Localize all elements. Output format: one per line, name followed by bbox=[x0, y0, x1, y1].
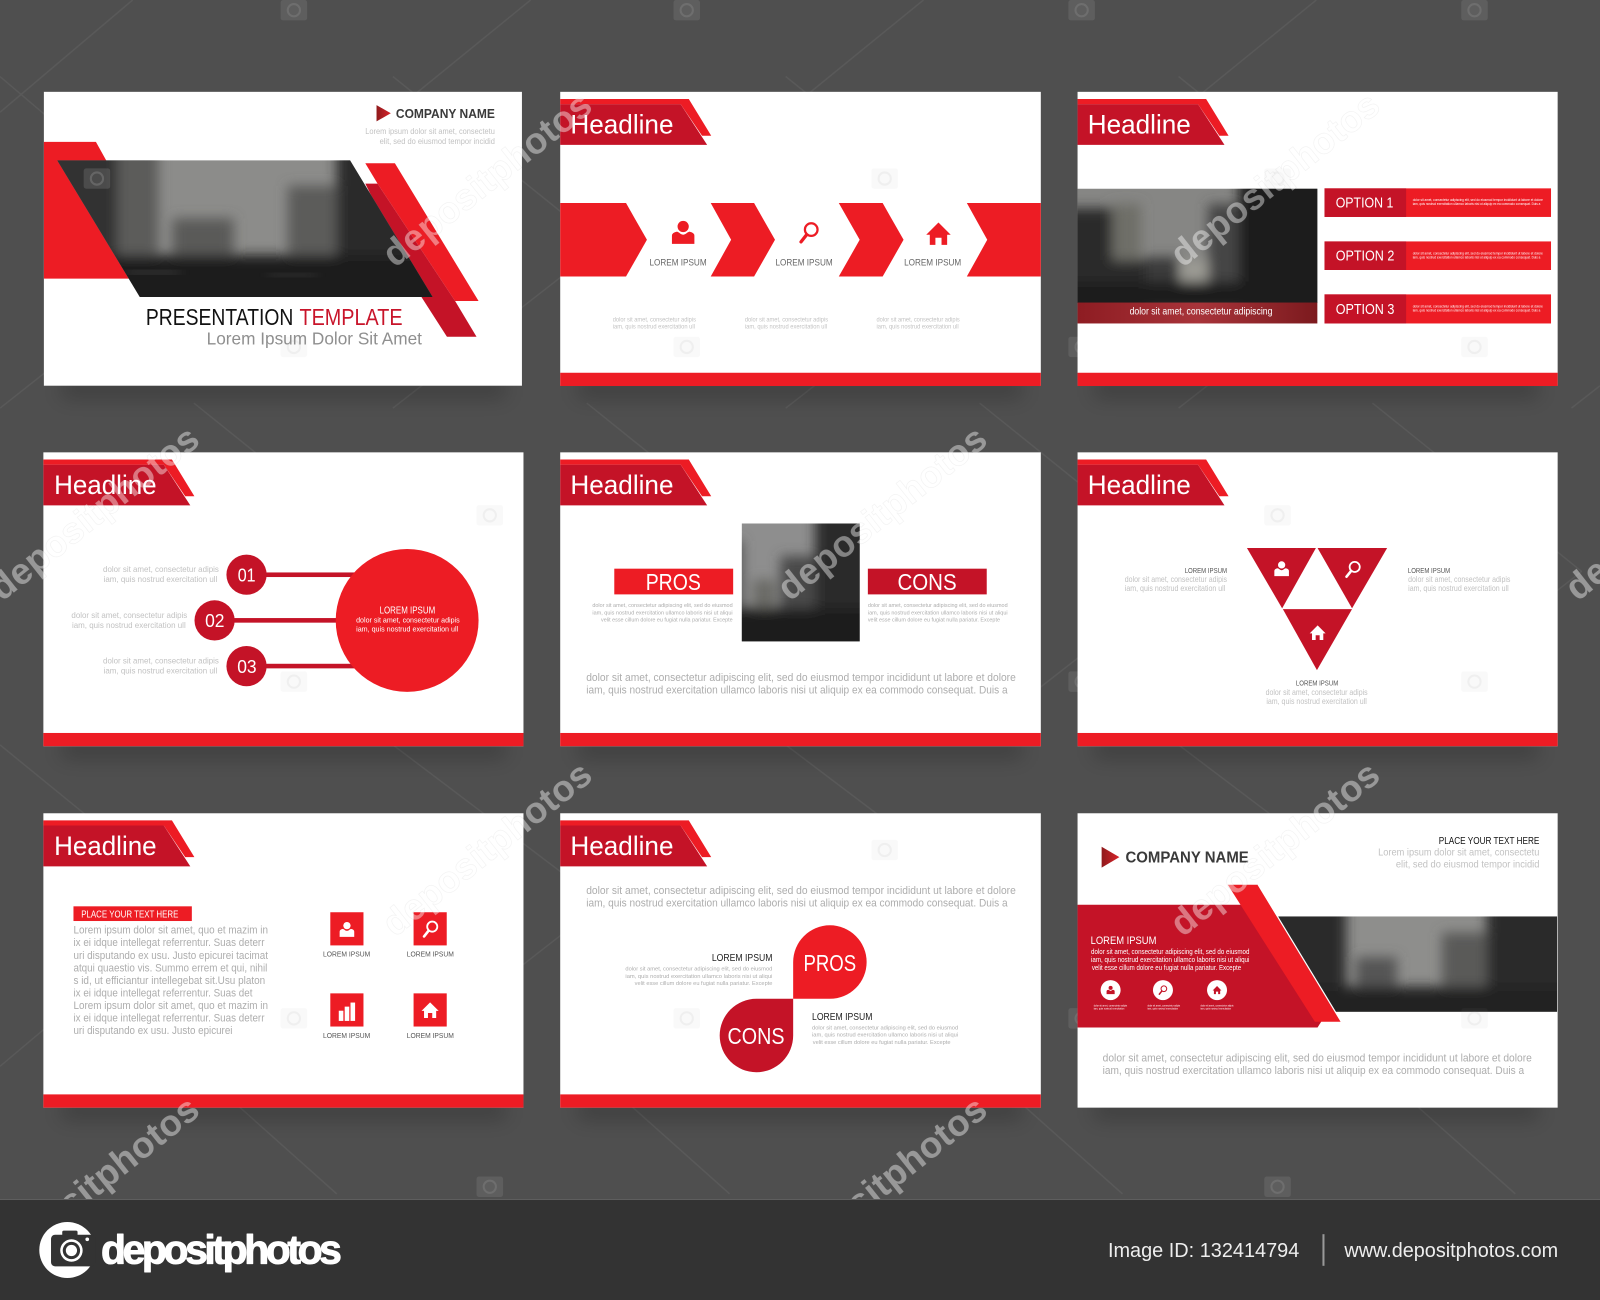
paragraph bbox=[73, 924, 268, 1037]
left text: dolor sit amet, consectetur adipis bbox=[1125, 575, 1227, 584]
text tag: PLACE YOUR TEXT HERE bbox=[81, 909, 179, 920]
step descriptions: dolor sit amet, consectetur adipis bbox=[613, 316, 696, 323]
step descriptions: iam, quis nostrud exercitation ull bbox=[613, 324, 695, 331]
item descriptions: dolor sit amet, consectetur adipis bbox=[103, 564, 219, 574]
pros description: dolor sit amet, consectetur adipiscing elit, sed do eiusmod bbox=[592, 603, 733, 609]
presentation title: TEMPLATE bbox=[299, 304, 403, 330]
body text: dolor sit amet, consectetur adipiscing elit, sed do eiusmod tempor incididunt ut labore et dolore bbox=[586, 672, 1016, 684]
presentation title: PRESENTATION bbox=[146, 304, 293, 330]
step descriptions bbox=[613, 316, 960, 331]
watermark camera marks on background bbox=[281, 0, 1488, 1197]
body text: dolor sit amet, consectetur adipiscing elit, sed do eiusmod tempor incididunt ut labore et dolore bbox=[586, 885, 1016, 897]
red block behind photo bbox=[44, 142, 204, 279]
headline banner: Headline bbox=[54, 831, 157, 861]
company name: COMPANY NAME bbox=[396, 106, 495, 121]
watermark text: depositphotos bbox=[769, 417, 994, 608]
item descriptions bbox=[71, 564, 219, 675]
option 2 bar bbox=[1324, 241, 1551, 270]
step descriptions: iam, quis nostrud exercitation ull bbox=[745, 324, 827, 331]
triangle left bbox=[1247, 548, 1316, 608]
option 1 bar: iam, quis nostrud exercitation ullamco laboris nisi ut aliquip ex ea commodo consequat. Duis a bbox=[1413, 202, 1541, 206]
icon tile: search: LOREM IPSUM bbox=[407, 950, 454, 959]
headline banner bbox=[43, 820, 194, 866]
bottom text: LOREM IPSUM bbox=[1296, 679, 1338, 688]
right text: iam, quis nostrud exercitation ull bbox=[1408, 584, 1509, 593]
right text: LOREM IPSUM bbox=[1408, 566, 1450, 575]
circle 01: 01 bbox=[238, 565, 256, 586]
panel icon: person bbox=[1094, 980, 1127, 1011]
slide 9: closing slide bbox=[1078, 813, 1573, 1108]
body text: dolor sit amet, consectetur adipiscing elit, sed do eiusmod tempor incididunt ut labore et dolore bbox=[1103, 1052, 1532, 1064]
panel icon: search: dolor sit amet, consectetur adipis bbox=[1147, 1004, 1180, 1008]
slide 3: options bbox=[1057, 92, 1558, 386]
item descriptions: dolor sit amet, consectetur adipis bbox=[103, 655, 219, 665]
bottom text: iam, quis nostrud exercitation ull bbox=[1266, 697, 1367, 706]
pros description bbox=[592, 603, 733, 623]
bright diagonal strip bbox=[1228, 885, 1341, 1022]
paragraph: atqui quaestio vis. Summo errem et qui, nihil bbox=[73, 962, 267, 974]
circle 01 bbox=[226, 555, 267, 595]
chevrons bbox=[560, 203, 1041, 277]
photo caption band bbox=[1078, 303, 1317, 323]
panel icon: home bbox=[1201, 980, 1234, 1011]
big circle bbox=[336, 549, 479, 692]
bottom text: dolor sit amet, consectetur adipis bbox=[1266, 688, 1368, 697]
icon tile: home: LOREM IPSUM bbox=[407, 1031, 454, 1040]
step descriptions: dolor sit amet, consectetur adipis bbox=[745, 316, 828, 323]
paragraph: uri disputando ex usu. Justo epicurei bbox=[73, 1025, 232, 1037]
cons box: CONS bbox=[897, 569, 957, 595]
step labels: LOREM IPSUM bbox=[649, 257, 707, 267]
cons drop bbox=[720, 999, 793, 1072]
blurred city photo bbox=[1078, 188, 1318, 303]
panel icon: search: iam, quis nostrud exercitation bbox=[1147, 1007, 1178, 1011]
paragraph: ix ei idque intellegat referrentur. Suas deterr bbox=[73, 937, 265, 949]
headline banner bbox=[43, 459, 194, 505]
pros text: dolor sit amet, consectetur adipiscing elit, sed do eiusmod bbox=[625, 967, 772, 973]
slide 1: title slide bbox=[31, 92, 522, 386]
option 3 bar bbox=[1324, 294, 1551, 323]
pros text: LOREM IPSUM bbox=[712, 953, 772, 964]
triangle right bbox=[1318, 548, 1387, 608]
connector lines bbox=[214, 572, 367, 668]
option 3 bar: OPTION 3 bbox=[1336, 302, 1394, 318]
panel text bbox=[1091, 935, 1250, 972]
body text: iam, quis nostrud exercitation ullamco laboris nisi ut aliquip ex ea commodo consequat. Duis a bbox=[586, 684, 1008, 696]
cons text: dolor sit amet, consectetur adipiscing elit, sed do eiusmod bbox=[812, 1025, 958, 1031]
intro text bbox=[365, 127, 495, 146]
circle 02 bbox=[194, 600, 235, 641]
watermark text: depositphotos bbox=[374, 753, 600, 944]
pros description: iam, quis nostrud exercitation ullamco laboris nisi ut aliqui bbox=[592, 610, 733, 616]
intro text: Lorem ipsum dolor sit amet, consectetu bbox=[365, 127, 495, 136]
top right text: PLACE YOUR TEXT HERE bbox=[1439, 836, 1540, 847]
pros box bbox=[614, 569, 733, 595]
watermark text: depositphotos bbox=[1162, 753, 1387, 944]
icon: home bbox=[926, 222, 951, 245]
intro text: elit, sed do eiusmod tempor incidid bbox=[380, 137, 495, 146]
paragraph: ix ei idque intellegat referrentur. Suas deterr bbox=[73, 1013, 265, 1025]
body text bbox=[586, 672, 1016, 696]
watermark text: depositphotos bbox=[769, 1088, 994, 1279]
headline banner: Headline bbox=[570, 470, 673, 500]
dark diagonal strip bbox=[365, 184, 477, 337]
option 2 bar: dolor sit amet, consectetur adipiscing elit, sed do eiusmod tempor incididunt ut labore et dolore bbox=[1413, 252, 1543, 256]
paragraph: uri disputando ex usu. Justo epicurei tacimat bbox=[73, 950, 268, 962]
step labels: LOREM IPSUM bbox=[776, 257, 833, 267]
slide 4: numbered circles bbox=[43, 452, 523, 746]
big circle: LOREM IPSUM bbox=[380, 605, 435, 616]
photo caption band: dolor sit amet, consectetur adipiscing bbox=[1130, 306, 1272, 317]
bottom text bbox=[1266, 679, 1368, 706]
option 1 bar bbox=[1324, 188, 1551, 217]
headline banner bbox=[560, 820, 711, 866]
option 2 bar: iam, quis nostrud exercitation ullamco laboris nisi ut aliquip ex ea commodo consequat. Duis a bbox=[1413, 256, 1541, 260]
cons description: velit esse cillum dolore eu fugiat nulla pariatur. Excepte bbox=[868, 617, 1000, 623]
step descriptions: iam, quis nostrud exercitation ull bbox=[877, 324, 959, 331]
icon tile: home bbox=[407, 993, 454, 1040]
icon: person bbox=[1274, 561, 1289, 576]
pros text: iam, quis nostrud exercitation ullamco laboris nisi ut aliqui bbox=[625, 974, 772, 980]
slide 5: pros and cons with photo bbox=[560, 452, 1041, 746]
option 3 bar: iam, quis nostrud exercitation ullamco laboris nisi ut aliquip ex ea commodo consequat. Duis a bbox=[1413, 309, 1541, 313]
right text bbox=[1408, 566, 1510, 593]
watermark text: depositphotos bbox=[1162, 84, 1387, 275]
cons description: iam, quis nostrud exercitation ullamco laboris nisi ut aliqui bbox=[868, 610, 1008, 616]
body text: iam, quis nostrud exercitation ullamco laboris nisi ut aliquip ex ea commodo consequat. Duis a bbox=[1103, 1065, 1524, 1077]
slide 2: chevron process bbox=[560, 92, 1041, 386]
circle 03 bbox=[226, 646, 267, 686]
blurred city photo bbox=[57, 160, 432, 297]
cons text: velit esse cillum dolore eu fugiat nulla pariatur. Excepte bbox=[813, 1040, 951, 1046]
icon tile: bars bbox=[323, 993, 370, 1040]
triangle bottom bbox=[1283, 609, 1352, 670]
headline banner bbox=[560, 459, 711, 505]
right text: dolor sit amet, consectetur adipis bbox=[1408, 575, 1510, 584]
icon tile: person bbox=[323, 912, 370, 959]
step descriptions: dolor sit amet, consectetur adipis bbox=[877, 316, 960, 323]
body text: iam, quis nostrud exercitation ullamco laboris nisi ut aliquip ex ea commodo consequat. Duis a bbox=[586, 898, 1008, 910]
headline banner: Headline bbox=[1088, 470, 1191, 500]
slide 8: pros and cons drops bbox=[560, 813, 1041, 1108]
paragraph: Lorem ipsum dolor sit amet, quo et mazim in bbox=[73, 1000, 268, 1012]
panel icon: search bbox=[1147, 980, 1180, 1011]
subtitle: Lorem Ipsum Dolor Sit Amet bbox=[207, 328, 422, 348]
panel icon: person: dolor sit amet, consectetur adipis bbox=[1094, 1004, 1127, 1008]
pros description: velit esse cillum dolore eu fugiat nulla pariatur. Excepte bbox=[601, 617, 733, 623]
option 2 bar: OPTION 2 bbox=[1336, 249, 1394, 265]
headline banner: Headline bbox=[1088, 110, 1191, 140]
item descriptions: dolor sit amet, consectetur adipis bbox=[71, 610, 188, 620]
watermark text: depositphotos bbox=[374, 84, 600, 275]
top right text: elit, sed do eiusmod tempor incidid bbox=[1396, 860, 1540, 871]
text tag bbox=[73, 906, 192, 921]
panel icon: home: dolor sit amet, consectetur adipis bbox=[1201, 1004, 1234, 1008]
option 1 bar: OPTION 1 bbox=[1336, 196, 1393, 212]
presentation title bbox=[146, 304, 403, 330]
image id: Image ID: 132414794 bbox=[1108, 1240, 1299, 1262]
panel icon: home: iam, quis nostrud exercitation bbox=[1201, 1007, 1231, 1011]
top right text: Lorem ipsum dolor sit amet, consectetu bbox=[1378, 848, 1539, 859]
item descriptions: iam, quis nostrud exercitation ull bbox=[104, 574, 217, 584]
blurred city photo bbox=[742, 524, 860, 642]
top right text bbox=[1378, 836, 1540, 871]
logo mark bbox=[39, 1222, 96, 1278]
cons description bbox=[868, 603, 1008, 623]
company name: COMPANY NAME bbox=[1126, 850, 1249, 867]
body text bbox=[1103, 1052, 1532, 1077]
blurred city photo bbox=[1277, 916, 1558, 1012]
icon tile: person: LOREM IPSUM bbox=[323, 950, 370, 959]
panel text: iam, quis nostrud exercitation ullamco laboris nisi ut aliqui bbox=[1091, 955, 1250, 964]
cons description: dolor sit amet, consectetur adipiscing elit, sed do eiusmod bbox=[868, 603, 1008, 609]
headline banner: Headline bbox=[570, 831, 673, 861]
panel text: LOREM IPSUM bbox=[1091, 935, 1156, 947]
circle 03: 03 bbox=[237, 656, 257, 677]
icon tile: bars: LOREM IPSUM bbox=[323, 1031, 370, 1040]
icon tile: search bbox=[407, 912, 454, 959]
pros drop bbox=[793, 925, 867, 999]
pros text: velit esse cillum dolore eu fugiat nulla pariatur. Excepte bbox=[635, 981, 772, 987]
cons text: iam, quis nostrud exercitation ullamco laboris nisi ut aliqui bbox=[812, 1032, 958, 1038]
pros text bbox=[625, 953, 772, 987]
step labels bbox=[649, 257, 961, 267]
watermark camera marks on slides bbox=[84, 168, 1488, 1029]
headline banner bbox=[1078, 459, 1229, 505]
pros drop: PROS bbox=[803, 950, 856, 976]
logo wordmark: depositphotos bbox=[101, 1226, 342, 1272]
pros box: PROS bbox=[646, 569, 701, 595]
paragraph: s id, ut efficiantur intellegebat sit.Usu platon bbox=[73, 975, 265, 987]
slide 7: text and icon grid bbox=[43, 813, 523, 1108]
circle 02: 02 bbox=[205, 610, 224, 631]
option 1 bar: dolor sit amet, consectetur adipiscing elit, sed do eiusmod tempor incididunt ut labore et dolore bbox=[1413, 198, 1543, 202]
panel icon: person: iam, quis nostrud exercitation bbox=[1094, 1007, 1125, 1011]
step labels: LOREM IPSUM bbox=[904, 257, 961, 267]
cons text bbox=[812, 1012, 958, 1046]
item descriptions: iam, quis nostrud exercitation ull bbox=[72, 620, 186, 630]
panel text: dolor sit amet, consectetur adipiscing elit, sed do eiusmod bbox=[1091, 947, 1249, 956]
dark red panel bbox=[1078, 905, 1321, 1027]
headline banner: Headline bbox=[570, 110, 673, 140]
body text bbox=[586, 885, 1016, 910]
left text: LOREM IPSUM bbox=[1185, 566, 1227, 575]
slide 6: triangle diagram bbox=[1078, 452, 1558, 746]
cons text: LOREM IPSUM bbox=[812, 1012, 872, 1023]
logo arrow bbox=[1102, 847, 1119, 868]
headline banner: Headline bbox=[54, 470, 157, 500]
big circle: dolor sit amet, consectetur adipis bbox=[356, 615, 460, 624]
icon: search bbox=[801, 223, 818, 242]
icon: home bbox=[1310, 625, 1326, 640]
paragraph: Lorem ipsum dolor sit amet, quo et mazim in bbox=[73, 924, 268, 936]
cons box bbox=[868, 569, 987, 595]
big circle: iam, quis nostrud exercitation ull bbox=[356, 625, 458, 634]
icon: person bbox=[672, 221, 694, 244]
paragraph: ix ei idque intellegat referrentur. Suas det bbox=[73, 988, 252, 1000]
bright diagonal strip bbox=[365, 163, 479, 301]
panel text: velit esse cillum dolore eu fugiat nulla pariatur. Excepte bbox=[1092, 963, 1241, 972]
icon: search bbox=[1347, 562, 1360, 577]
footer bar bbox=[0, 1199, 1600, 1300]
left text: iam, quis nostrud exercitation ull bbox=[1125, 584, 1225, 593]
item descriptions: iam, quis nostrud exercitation ull bbox=[104, 665, 217, 675]
website: www.depositphotos.com bbox=[1343, 1240, 1558, 1262]
headline banner bbox=[560, 99, 711, 145]
logo arrow bbox=[377, 105, 391, 121]
headline banner bbox=[1078, 99, 1229, 145]
cons drop: CONS bbox=[728, 1023, 784, 1049]
option 3 bar: dolor sit amet, consectetur adipiscing elit, sed do eiusmod tempor incididunt ut labore et dolore bbox=[1413, 305, 1543, 309]
left text bbox=[1125, 566, 1227, 593]
